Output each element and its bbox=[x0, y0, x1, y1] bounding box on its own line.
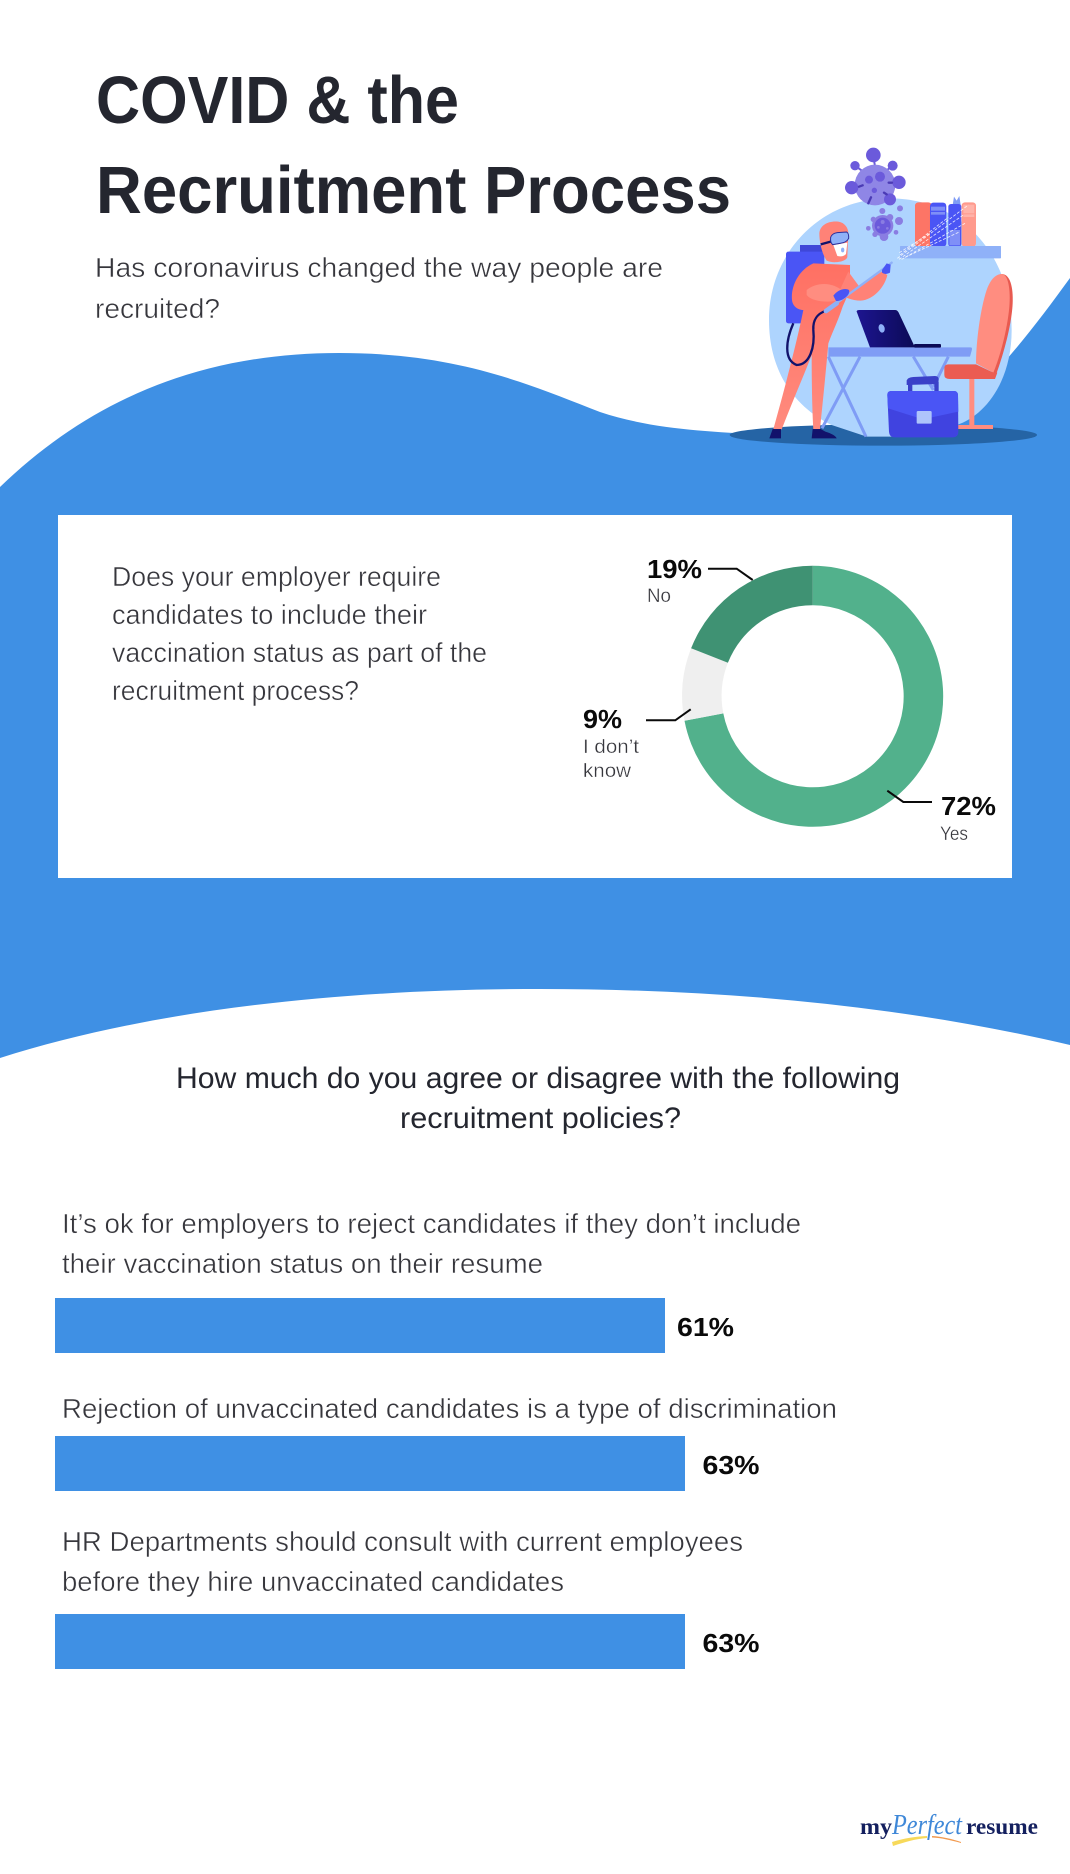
logo: myPerfectResume bbox=[860, 1809, 1038, 1846]
illustration: boots bbox=[769, 429, 837, 438]
label: 19% No bbox=[647, 554, 753, 607]
title: Recruitment Process bbox=[96, 153, 731, 228]
logo: myPerfectResume: Perfect bbox=[891, 1809, 963, 1841]
donut segment: No 19% bbox=[691, 566, 813, 663]
illustration: shelf bbox=[900, 246, 1001, 258]
title: COVID & the bbox=[96, 63, 459, 138]
illustration: table bbox=[822, 347, 972, 437]
heading: agreement question bbox=[176, 1062, 900, 1135]
logo: myPerfectResume: my bbox=[860, 1814, 893, 1839]
donut segment: Yes 72% bbox=[684, 566, 943, 827]
illustration: protective suit bbox=[773, 222, 887, 429]
subtitle bbox=[95, 252, 663, 324]
illustration: worker disinfecting office bbox=[730, 148, 1037, 446]
bar chart: recruitment policies bbox=[55, 1208, 837, 1669]
illustration: disinfectant spray bbox=[897, 205, 968, 259]
title bbox=[96, 63, 731, 228]
label: 9% I don't know: know bbox=[583, 761, 631, 782]
bar item: consult employees 63%: HR Departments should consult with current employees bbox=[62, 1526, 743, 1557]
question text: candidates to include their bbox=[112, 599, 427, 630]
label: 72% Yes: Yes bbox=[940, 824, 968, 845]
panel: vaccination status question bbox=[58, 515, 1012, 878]
bar item: consult employees 63%: 63% bbox=[702, 1628, 760, 1658]
label: 19% No: No bbox=[647, 586, 671, 607]
bar item: consult employees 63% bbox=[55, 1526, 760, 1669]
logo: myPerfectResume: resume bbox=[966, 1814, 1038, 1839]
label: 9% I don't know bbox=[583, 704, 691, 782]
subtitle: Has coronavirus changed the way people are bbox=[95, 252, 663, 283]
illustration: gloves bbox=[833, 263, 891, 301]
illustration: floor shadow bbox=[730, 424, 1037, 446]
illustration: chair bbox=[944, 274, 1013, 429]
label: 19% No: 19% bbox=[647, 554, 702, 584]
donut chart bbox=[682, 566, 943, 827]
heading: agreement question: recruitment policies? bbox=[400, 1102, 681, 1135]
illustration: spray lance bbox=[825, 263, 892, 312]
illustration: books bbox=[915, 196, 976, 247]
label: 72% Yes: 72% bbox=[941, 791, 996, 821]
illustration: hose bbox=[787, 311, 826, 365]
bar item: reject candidates 61%: 61% bbox=[677, 1312, 734, 1342]
question text: Does your employer require bbox=[112, 561, 441, 592]
panel background bbox=[58, 515, 1012, 878]
donut segment: I don't know 9% bbox=[682, 648, 728, 721]
illustration: large virus bbox=[845, 148, 906, 205]
bar item: consult employees 63%: before they hire unvaccinated candidates bbox=[62, 1566, 564, 1597]
illustration: background blob bbox=[769, 198, 1012, 437]
bar item: discrimination 63% bbox=[55, 1393, 837, 1491]
illustration: backpack bbox=[786, 245, 824, 323]
illustration: small virus bbox=[866, 205, 903, 241]
heading: agreement question: How much do you agree or disagree with the following bbox=[176, 1062, 900, 1095]
label: 72% Yes bbox=[887, 791, 996, 845]
illustration: briefcase bbox=[887, 376, 958, 437]
bar item: reject candidates 61%: It’s ok for employers to reject candidates if they don’t include bbox=[62, 1208, 801, 1239]
subtitle: recruited? bbox=[95, 293, 220, 324]
question text: vaccination status as part of the bbox=[112, 637, 487, 668]
illustration: laptop bbox=[857, 310, 941, 348]
label: 9% I don't know: I don’t bbox=[583, 737, 640, 758]
bar item: discrimination 63%: Rejection of unvaccinated candidates is a type of discrimination bbox=[62, 1393, 837, 1424]
question text bbox=[112, 561, 487, 706]
label: 9% I don't know: 9% bbox=[583, 704, 622, 734]
blue wave background bbox=[0, 278, 1070, 1058]
bar item: reject candidates 61%: their vaccination status on their resume bbox=[62, 1248, 543, 1279]
bar item: discrimination 63%: 63% bbox=[702, 1450, 760, 1480]
bar item: reject candidates 61% bbox=[55, 1208, 801, 1353]
question text: recruitment process? bbox=[112, 675, 359, 706]
